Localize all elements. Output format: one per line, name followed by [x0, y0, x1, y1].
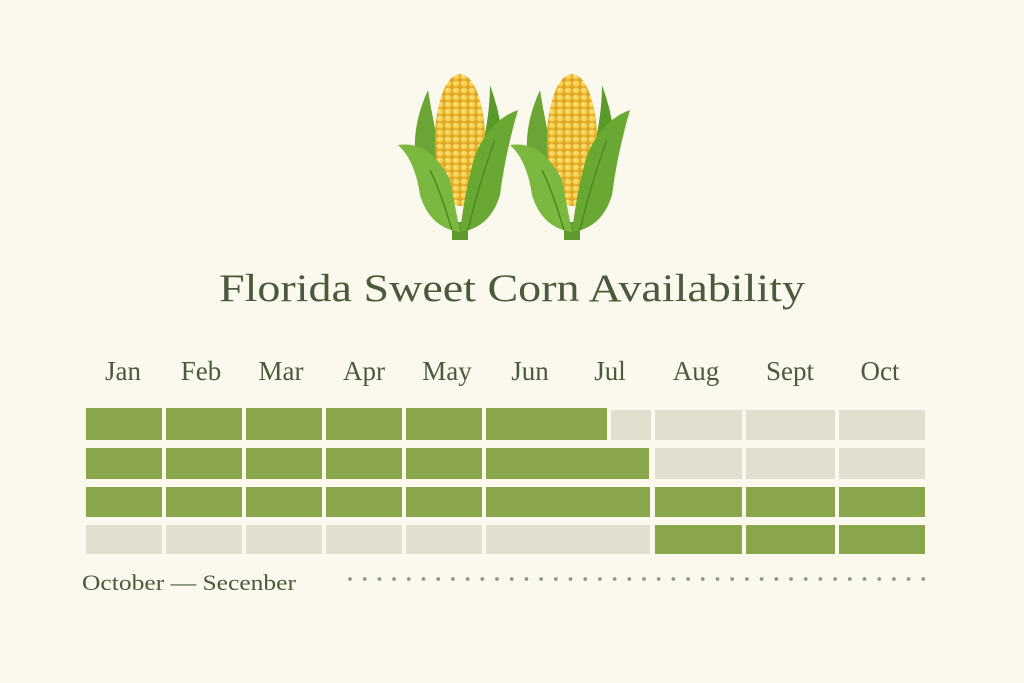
month labels: Jan	[105, 356, 141, 386]
title: Florida Sweet Corn Availability	[219, 267, 806, 310]
month labels: Jun	[511, 356, 549, 386]
icon: two corn cobs	[398, 74, 630, 240]
dotted line	[350, 577, 924, 581]
footnote label: October — Secenber	[82, 570, 297, 595]
row 1	[86, 408, 925, 440]
month labels: Apr	[343, 356, 385, 386]
row 2	[86, 448, 925, 479]
month labels: Jul	[594, 356, 626, 386]
row 3	[86, 487, 925, 517]
month labels: Aug	[673, 356, 719, 386]
month labels: Mar	[259, 356, 303, 386]
month labels: Oct	[861, 356, 900, 386]
availability grid	[86, 408, 925, 554]
month labels: May	[422, 356, 472, 386]
month labels: Sept	[766, 356, 814, 386]
row 4	[86, 525, 925, 554]
month labels	[105, 356, 900, 386]
month labels: Feb	[181, 356, 221, 386]
